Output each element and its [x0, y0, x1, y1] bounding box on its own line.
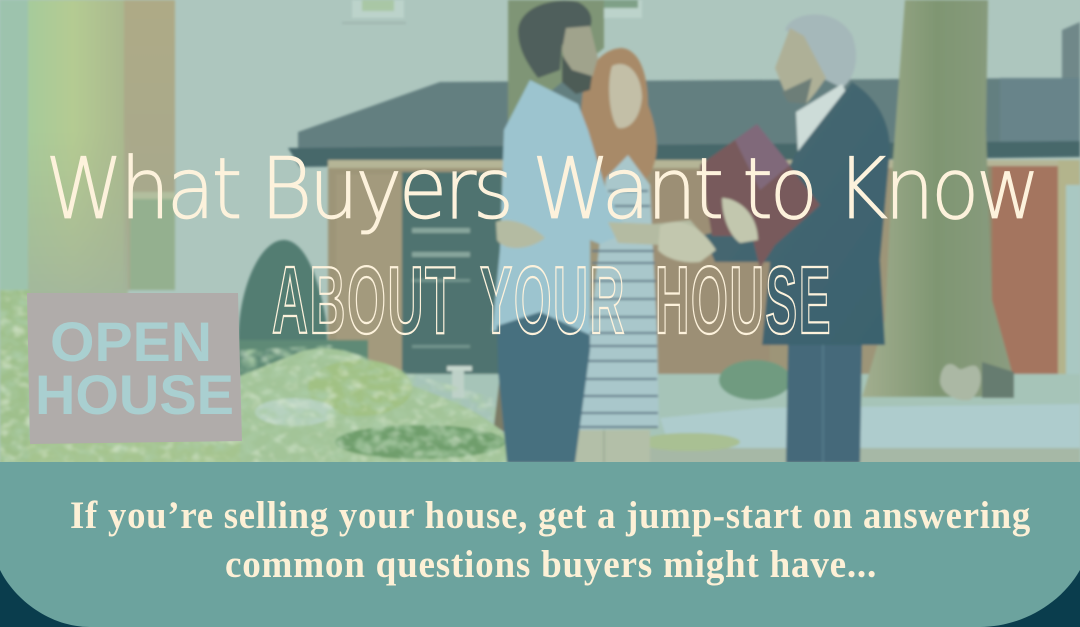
- intro line 1: If you’re selling your house, get a jump-start on answering: [70, 494, 1031, 537]
- woman: [573, 48, 659, 463]
- garage roof: [288, 22, 1080, 167]
- title: What Buyers Want to Know: What Buyers Want to Know: [45, 140, 1037, 239]
- green garden beds: [0, 290, 791, 464]
- panel: intro text: [0, 462, 1080, 627]
- open house sign: [27, 293, 242, 444]
- left tree and foliage: [0, 0, 175, 300]
- handshake: [658, 198, 758, 262]
- photo: couple and agent outside a house: [0, 0, 1080, 470]
- ground path: [405, 364, 1080, 462]
- middle tree trunk: [508, 0, 604, 125]
- text: HOUSE: [655, 247, 832, 354]
- upper window: [342, 0, 642, 24]
- subtitle: About Your House: ABOUT: [272, 247, 457, 354]
- subtitle: About Your House: YOUR: [480, 247, 626, 354]
- house wall: [0, 0, 1080, 463]
- man in light shirt: [492, 1, 712, 463]
- foliage texture: [0, 290, 506, 462]
- agent in dark suit: [704, 14, 890, 463]
- subtitle: About Your House: [272, 247, 832, 354]
- intro line 2: common questions buyers might have...: [225, 543, 877, 586]
- open house sign: HOUSE: [35, 363, 234, 426]
- shrub behind sign: [238, 238, 329, 342]
- red folder: [699, 140, 821, 266]
- garage front: [328, 160, 1080, 380]
- open house sign: OPEN: [50, 310, 212, 373]
- right tree: [862, 0, 1014, 400]
